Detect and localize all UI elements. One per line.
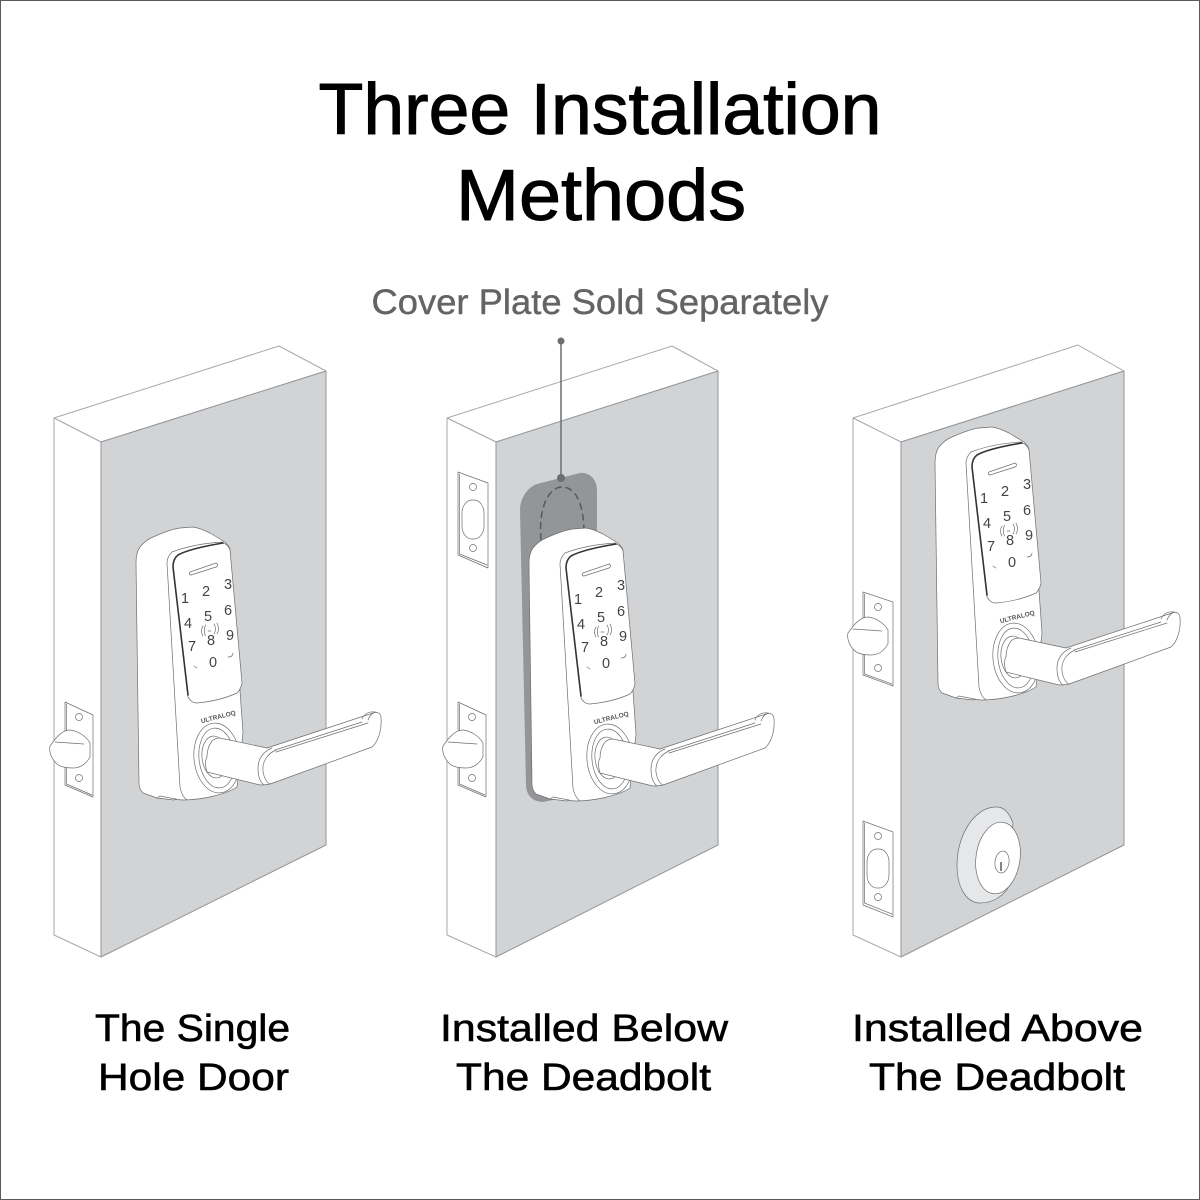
label: installed above the deadbolt: The Deadbolt: [869, 1057, 1125, 1099]
smart lock: 8: [600, 634, 608, 650]
label: single hole door: The Single: [95, 1008, 290, 1050]
smart lock: 9: [226, 628, 234, 644]
smart lock: 7: [987, 539, 995, 555]
title: Three Installation: [318, 70, 882, 150]
smart lock: 8: [1006, 533, 1014, 549]
upper latch plate: [848, 592, 893, 686]
upper latch plate: [458, 472, 488, 568]
smart lock: 1: [181, 591, 189, 607]
smart lock: 5: [1003, 509, 1011, 525]
callout leader line: [557, 338, 565, 482]
smart lock: 1: [980, 491, 988, 507]
label: installed above the deadbolt: [852, 1008, 1143, 1099]
smart lock: ULTRALOQ: [593, 711, 629, 726]
label: single hole door: [95, 1008, 290, 1099]
smart lock: 3: [617, 578, 625, 594]
label: installed above the deadbolt: Installed Above: [852, 1008, 1143, 1050]
smart lock: 1: [574, 592, 582, 608]
label: installed below the deadbolt: Installed Below: [440, 1008, 729, 1050]
subtitle: cover plate note: Cover Plate Sold Separately: [372, 283, 829, 322]
smart lock: 4: [983, 516, 991, 532]
title: Methods: [456, 156, 746, 236]
smart lock: [136, 527, 381, 800]
smart lock: 0: [602, 656, 610, 672]
door slab: [853, 345, 1124, 957]
smart lock: ULTRALOQ: [200, 710, 236, 725]
smart lock: 9: [619, 629, 627, 645]
cover plate: [520, 473, 600, 802]
title: [318, 70, 882, 236]
label: installed below the deadbolt: The Deadbolt: [456, 1057, 711, 1099]
smart lock: 2: [595, 585, 603, 601]
deadbolt strike plate: [863, 821, 893, 917]
deadbolt: [957, 807, 1025, 903]
label: installed below the deadbolt: [440, 1008, 729, 1099]
smart lock: ULTRALOQ: [999, 610, 1035, 625]
panel: installed below the deadbolt: [443, 338, 774, 957]
smart lock: [935, 427, 1180, 700]
smart lock: 6: [224, 603, 232, 619]
lower latch plate: [443, 702, 486, 797]
smart lock: 8: [207, 633, 215, 649]
smart lock: 4: [184, 616, 192, 632]
door slab: [447, 346, 718, 957]
smart lock: 5: [204, 609, 212, 625]
smart lock: 7: [188, 639, 196, 655]
smart lock: [529, 528, 774, 801]
smart lock: 2: [1001, 484, 1009, 500]
panel: single hole door: [50, 346, 381, 957]
smart lock: 4: [577, 617, 585, 633]
smart lock: 9: [1025, 528, 1033, 544]
door slab: [54, 346, 326, 957]
label: single hole door: Hole Door: [98, 1057, 289, 1099]
smart lock: 6: [617, 604, 625, 620]
smart lock: 2: [202, 584, 210, 600]
smart lock: 3: [224, 577, 232, 593]
panel: installed above the deadbolt: [848, 345, 1180, 957]
latch plate: [50, 702, 93, 797]
smart lock: 7: [581, 640, 589, 656]
smart lock: 6: [1023, 503, 1031, 519]
smart lock: 3: [1023, 477, 1031, 493]
smart lock: 0: [1008, 555, 1016, 571]
smart lock: 0: [209, 655, 217, 671]
smart lock: 5: [597, 610, 605, 626]
